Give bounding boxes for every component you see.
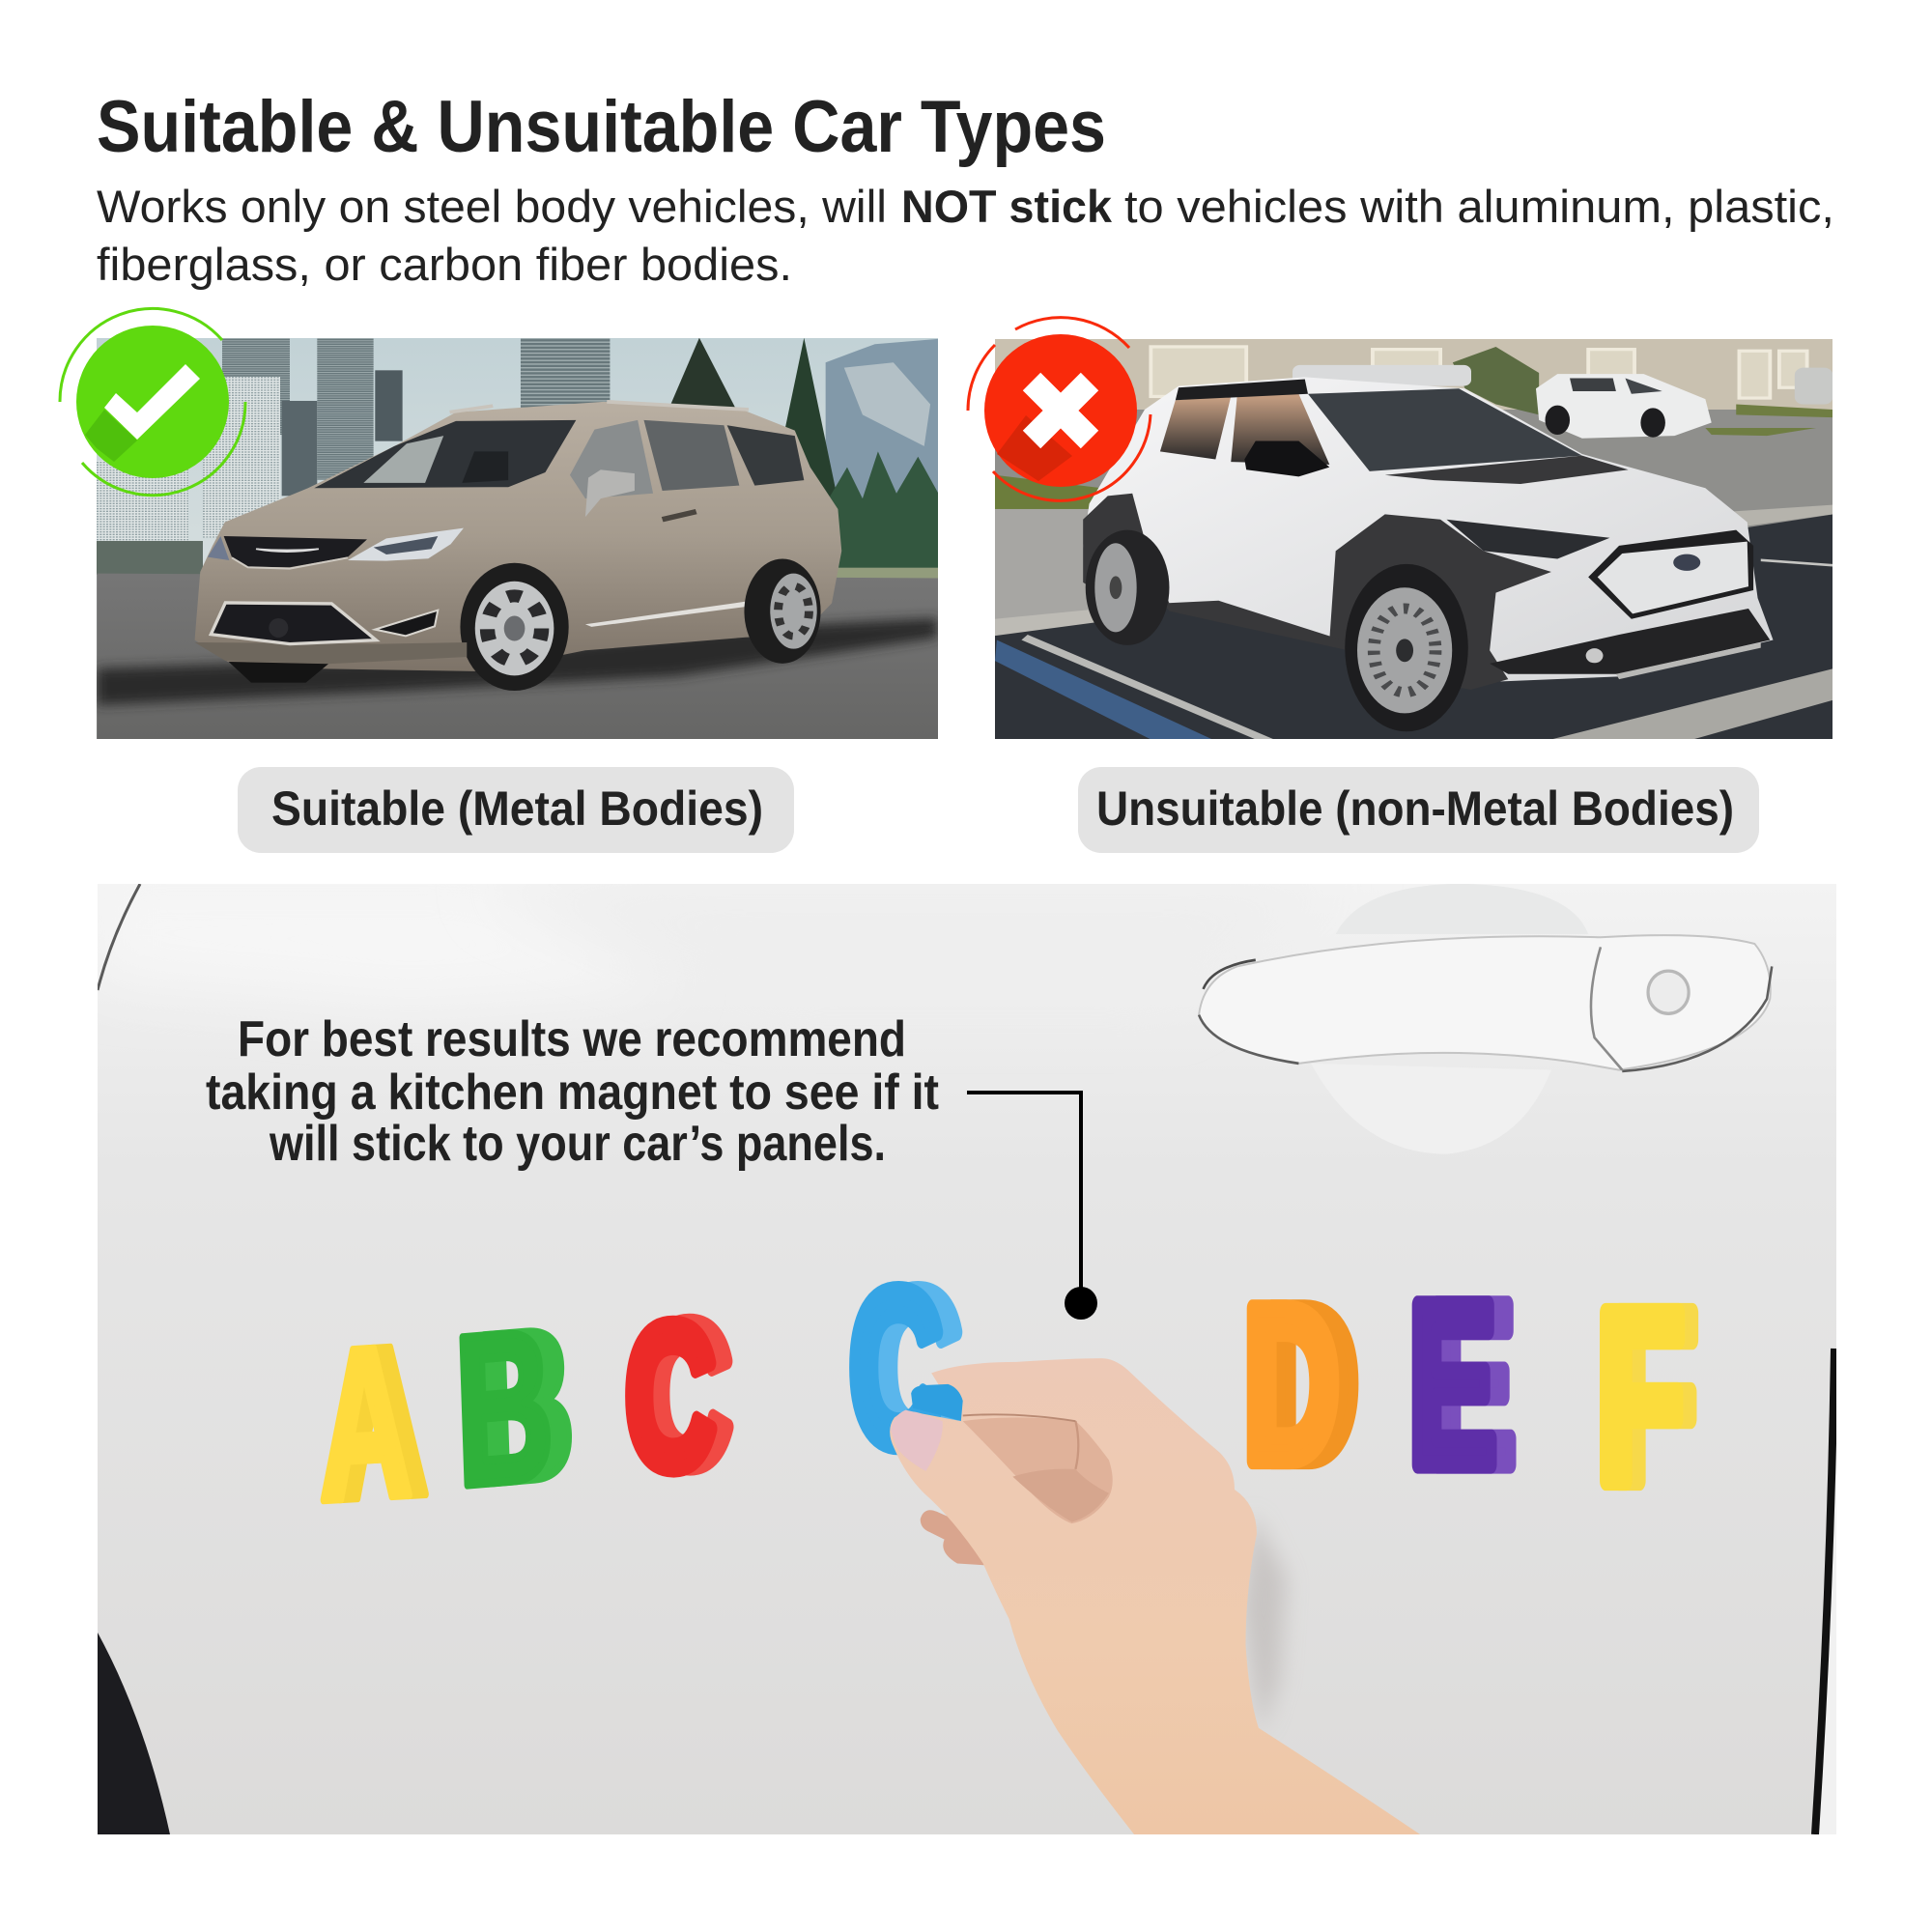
callout connector line <box>967 1093 1097 1320</box>
label pill: unsuitable <box>1078 767 1759 853</box>
panel: car door photo with magnets <box>98 884 1836 1835</box>
garage doors <box>1151 347 1807 398</box>
magnet F <box>1600 1302 1698 1492</box>
magnet A: A <box>316 1299 414 1546</box>
magnet F: F <box>1609 1262 1698 1534</box>
ground shadow <box>97 618 938 705</box>
magnet E <box>1412 1295 1517 1474</box>
magnet A <box>321 1343 429 1505</box>
thumbnail <box>891 1410 943 1471</box>
badge rings <box>968 318 1151 500</box>
magnet C held in hand: C <box>849 1243 943 1492</box>
icon: green check badge <box>60 308 245 496</box>
SUV body <box>1083 377 1774 682</box>
subtitle text block: fiberglass, or carbon fiber bodies. <box>97 239 792 290</box>
magnet C: C <box>641 1280 732 1510</box>
SUV wheels <box>1086 530 1468 731</box>
left city buildings <box>97 338 403 575</box>
door handle <box>1199 884 1772 1154</box>
blue magnet piece <box>911 1384 963 1421</box>
panel: suitable minivan photo <box>97 338 938 739</box>
label pill: suitable <box>238 767 794 853</box>
callout text <box>206 1011 939 1172</box>
subtitle text block: Works only on steel body vehicles, will <box>97 181 887 232</box>
palm <box>1453 347 1539 414</box>
magnet B: B <box>451 1285 557 1532</box>
shadow behind hand <box>1246 1524 1291 1717</box>
lower fingertips <box>921 1510 987 1565</box>
magnet F: F <box>1596 1262 1685 1534</box>
callout text: will stick to your car’s panels. <box>269 1116 886 1172</box>
magnet B: B <box>472 1283 579 1530</box>
hand <box>890 1358 1421 1835</box>
magnet D: D <box>1243 1262 1340 1509</box>
title: Suitable & Unsuitable Car Types <box>97 86 1106 168</box>
callout text: For best results we recommend <box>238 1011 906 1067</box>
magnet E: E <box>1428 1256 1516 1515</box>
SUV windows <box>1160 380 1629 484</box>
magnet C: C <box>625 1282 716 1512</box>
magnet B <box>460 1327 572 1490</box>
SUV front grille and headlight <box>1446 520 1770 679</box>
door shading <box>98 884 1836 1834</box>
magnet C <box>625 1314 734 1478</box>
magnet C held in hand: C <box>868 1243 962 1492</box>
icon: red cross badge <box>968 318 1151 500</box>
magnet D <box>1246 1299 1358 1470</box>
label pill: unsuitable: Unsuitable (non-Metal Bodies) <box>1096 781 1734 836</box>
street and grass <box>995 405 1833 739</box>
minivan body and wheels <box>195 402 841 691</box>
subtitle text block <box>97 181 1834 290</box>
subtitle text block: to vehicles with aluminum, plastic, <box>1124 181 1834 232</box>
background white SUVs <box>1293 365 1833 439</box>
magnet E: E <box>1408 1256 1496 1515</box>
magnet A: A <box>332 1298 431 1545</box>
magnet C held in hand <box>849 1281 962 1455</box>
curled fingers <box>963 1417 1113 1523</box>
SUV dark cladding <box>1083 494 1551 690</box>
right scenery <box>97 338 938 739</box>
minivan front details <box>195 528 467 683</box>
callout text: taking a kitchen magnet to see if it <box>206 1065 939 1121</box>
label pill: suitable: Suitable (Metal Bodies) <box>271 781 763 836</box>
panel: unsuitable SUV photo <box>995 339 1833 739</box>
badge rings <box>60 308 245 496</box>
magnet D: D <box>1263 1262 1359 1509</box>
subtitle text block: NOT stick <box>901 181 1113 232</box>
palm, thumb and wrist <box>890 1358 1421 1835</box>
